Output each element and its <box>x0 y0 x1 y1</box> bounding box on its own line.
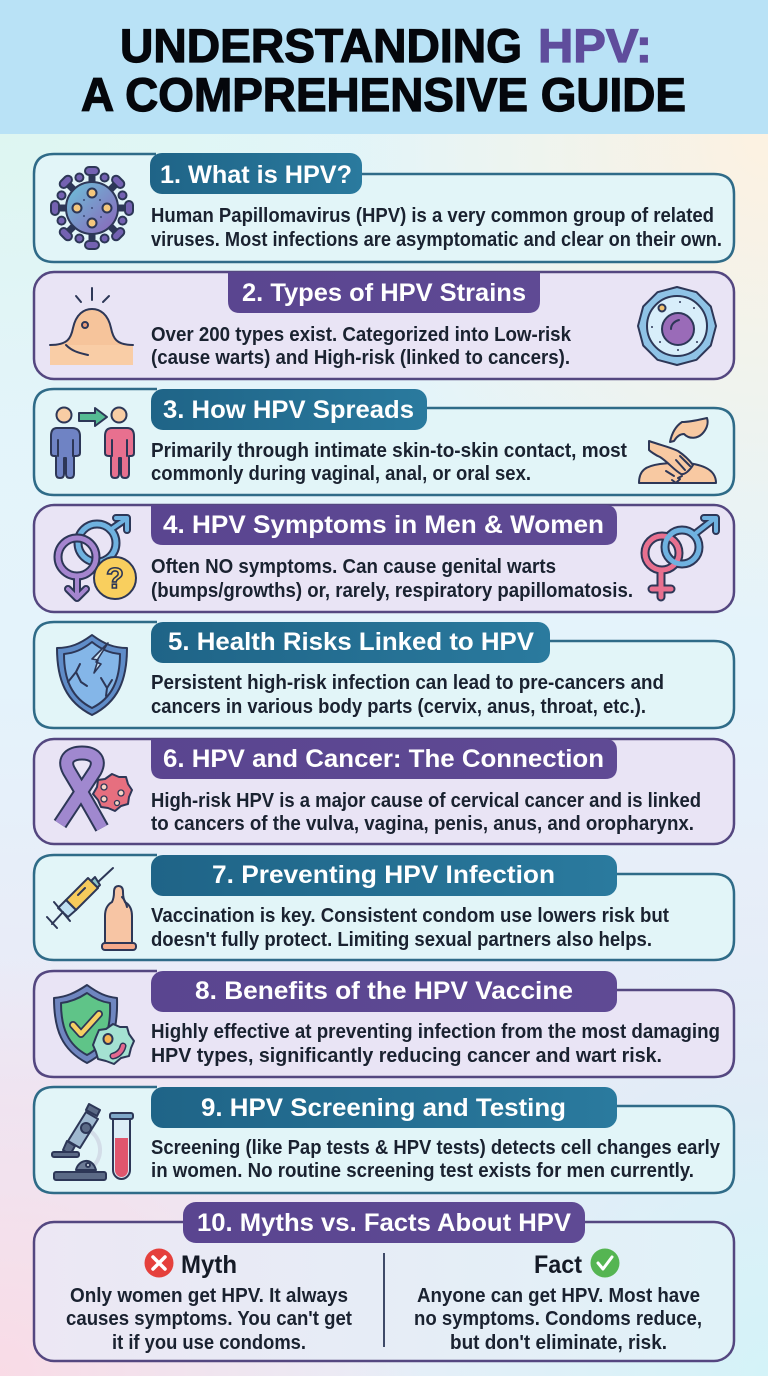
divider <box>383 1253 385 1347</box>
panel 10: myths vs facts <box>34 1202 734 1361</box>
heading tab 2: 2. Types of HPV Strains <box>242 279 526 307</box>
body text 9: in women. No routine screening test exists for men currently. <box>151 1160 694 1182</box>
panel 4: symptoms <box>34 505 734 612</box>
panel 9: screening <box>34 1087 734 1193</box>
icon: skin contact hands <box>639 418 716 483</box>
heading tab 6: 6. HPV and Cancer: The Connection <box>163 745 604 773</box>
myth column: causes symptoms. You can't get <box>66 1308 352 1330</box>
heading tab 2 <box>228 272 540 313</box>
panel 1: what is HPV <box>34 153 734 262</box>
panel 5: health risks <box>34 622 734 728</box>
body text 3 <box>151 440 627 485</box>
body text 4 <box>151 556 633 602</box>
icon: syringe and condom <box>47 868 136 950</box>
panel 2: types of strains <box>34 272 734 379</box>
fact column: Fact <box>534 1251 583 1279</box>
body text 2: (cause warts) and High-risk (linked to cancers). <box>151 347 570 369</box>
title: HPV: <box>538 19 652 72</box>
panel 7: preventing <box>34 855 734 960</box>
icon: shield with check and cell <box>54 985 134 1064</box>
icon: microscope and test tube <box>52 1104 133 1180</box>
body text 7: Vaccination is key. Consistent condom use lowers risk but <box>151 905 669 927</box>
body text 3: Primarily through intimate skin-to-skin contact, most <box>151 440 627 462</box>
body text 1: Human Papillomavirus (HPV) is a very common group of related <box>151 205 714 227</box>
body text 8: Highly effective at preventing infection from the most damaging <box>151 1021 720 1043</box>
body text 4: (bumps/growths) or, rarely, respiratory papillomatosis. <box>151 580 633 602</box>
body text 6: to cancers of the vulva, vagina, penis, anus, and oropharynx. <box>151 813 694 835</box>
heading tab 9 <box>151 1087 617 1128</box>
icon: red cross <box>144 1248 174 1278</box>
heading tab 7: 7. Preventing HPV Infection <box>212 861 555 889</box>
heading tab 3: 3. How HPV Spreads <box>163 396 414 424</box>
heading tab 3 <box>151 389 427 430</box>
heading tab 8 <box>151 971 617 1012</box>
heading tab 1 <box>150 153 362 194</box>
heading tab 6 <box>151 739 617 779</box>
icon: gender symbols with question mark <box>58 518 136 599</box>
myth column <box>66 1248 352 1354</box>
body text 1 <box>151 205 722 251</box>
icon: two people with arrow <box>51 408 134 478</box>
title: UNDERSTANDING <box>120 19 522 72</box>
body text 5 <box>151 672 664 718</box>
body text 6 <box>151 790 701 835</box>
body text 2: Over 200 types exist. Categorized into Low-risk <box>151 324 572 346</box>
body text 7: doesn't fully protect. Limiting sexual partners also helps. <box>151 929 652 951</box>
body text 6: High-risk HPV is a major cause of cervical cancer and is linked <box>151 790 701 812</box>
myth column: Myth <box>181 1251 237 1279</box>
fact column: Anyone can get HPV. Most have <box>417 1285 700 1307</box>
body text 9 <box>151 1137 721 1182</box>
heading tab 5: 5. Health Risks Linked to HPV <box>168 628 534 656</box>
heading tab 9: 9. HPV Screening and Testing <box>201 1094 566 1122</box>
body text 4: Often NO symptoms. Can cause genital warts <box>151 556 556 578</box>
body text 8: HPV types, significantly reducing cancer and wart risk. <box>151 1045 662 1067</box>
icon: virus <box>51 167 133 249</box>
myth column: it if you use condoms. <box>112 1332 306 1354</box>
icon: skin wart <box>50 288 133 365</box>
heading tab 10: 10. Myths vs. Facts About HPV <box>197 1209 571 1237</box>
icon: cell <box>638 287 716 365</box>
myth column: Only women get HPV. It always <box>70 1285 348 1307</box>
fact column <box>414 1248 702 1354</box>
heading tab 4: 4. HPV Symptoms in Men & Women <box>163 511 604 539</box>
icon: green check <box>590 1248 620 1278</box>
heading tab 7 <box>151 855 617 896</box>
panel 6: HPV and cancer <box>34 739 734 844</box>
title <box>81 19 686 121</box>
body text 5: cancers in various body parts (cervix, anus, throat, etc.). <box>151 696 646 718</box>
body text 3: commonly during vaginal, anal, or oral sex. <box>151 463 531 485</box>
heading tab 10 <box>183 1202 585 1243</box>
fact column: but don't eliminate, risk. <box>450 1332 667 1354</box>
panel 3: how HPV spreads <box>34 389 734 495</box>
body text 9: Screening (like Pap tests & HPV tests) detects cell changes early <box>151 1137 721 1159</box>
body text 5: Persistent high-risk infection can lead to pre-cancers and <box>151 672 664 694</box>
body text 2 <box>151 324 572 369</box>
title: A COMPREHENSIVE GUIDE <box>81 68 686 121</box>
icon: gender symbols <box>645 518 716 597</box>
body text 7 <box>151 905 669 951</box>
panel 8: vaccine benefits <box>34 971 734 1077</box>
icon: cracked shield <box>57 635 127 715</box>
icon: gender symbols with question mark: ? <box>106 563 124 595</box>
heading tab 8: 8. Benefits of the HPV Vaccine <box>195 977 573 1005</box>
icon: ribbon and cancer cell <box>60 753 132 828</box>
heading tab 1: 1. What is HPV? <box>160 161 352 189</box>
body text 1: viruses. Most infections are asymptomatic and clear on their own. <box>151 229 722 251</box>
fact column: no symptoms. Condoms reduce, <box>414 1308 702 1330</box>
heading tab 5 <box>151 622 550 663</box>
heading tab 4 <box>151 505 617 545</box>
body text 8 <box>151 1021 720 1067</box>
header band <box>0 0 768 134</box>
